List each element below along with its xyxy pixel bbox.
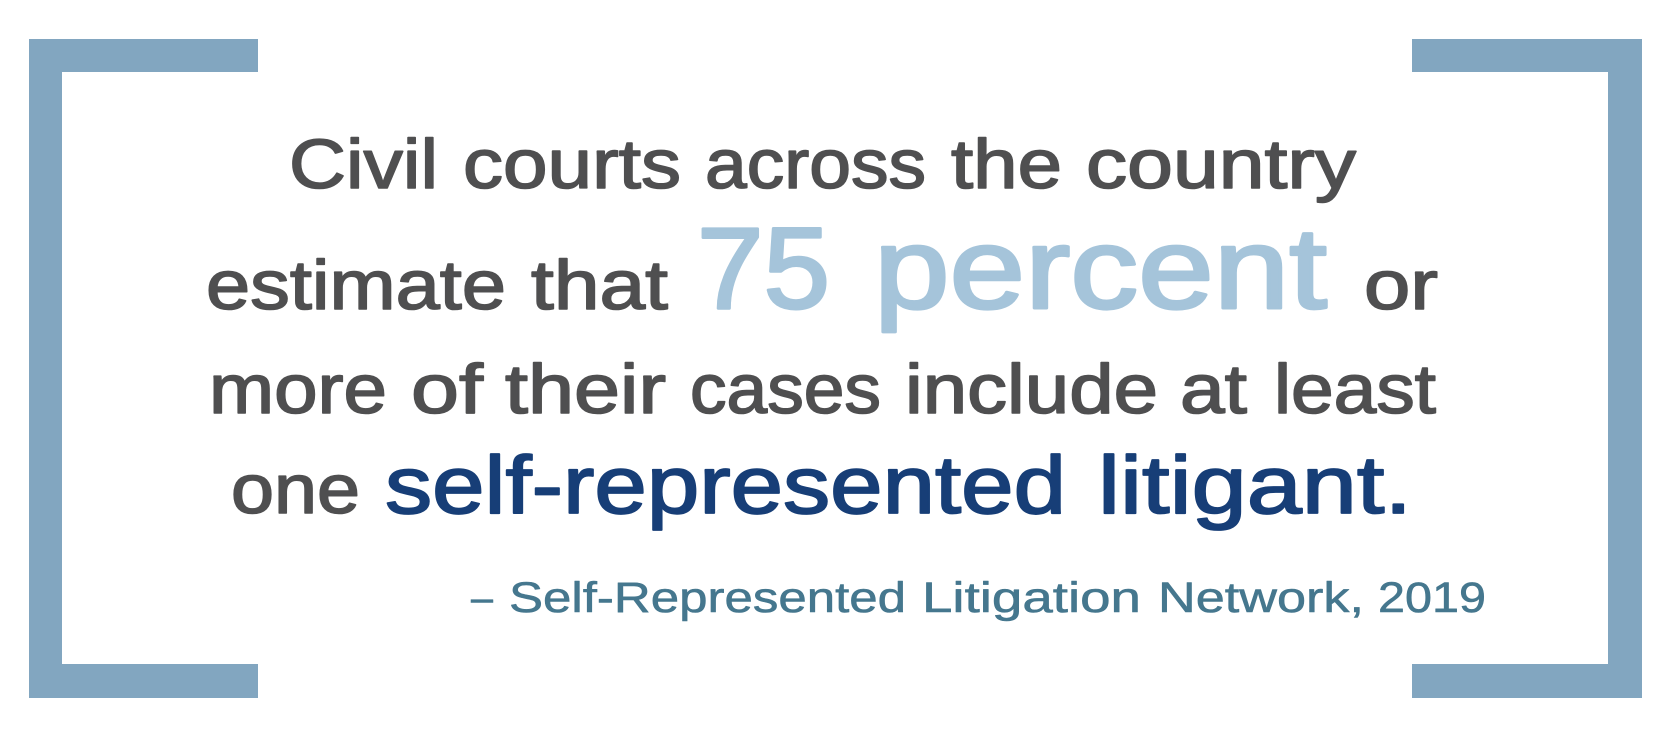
highlight: self-represented litigant: litigant. <box>1098 440 1412 531</box>
highlight: self-represented litigant: self-represented <box>385 440 1066 531</box>
quote line 3: cases <box>690 350 881 428</box>
source attribution: Self-Represented <box>509 574 906 622</box>
quote line 1 <box>289 125 1356 203</box>
highlight: 75 percent: percent <box>874 205 1327 333</box>
quote line 2: or <box>1364 246 1438 324</box>
quote line 4: one <box>231 450 360 528</box>
quote line 4 <box>231 440 1412 531</box>
quote line 3: least <box>1274 350 1436 428</box>
source attribution: 2019 <box>1378 574 1486 622</box>
quote line 3: more <box>209 350 387 428</box>
quote line 2: estimate <box>206 246 506 324</box>
source attribution: – <box>471 574 493 622</box>
quote line 1: the <box>951 125 1062 203</box>
quote line 3: at <box>1180 350 1247 428</box>
right bracket <box>1412 39 1642 698</box>
source attribution <box>471 574 1486 622</box>
quote line 1: Civil <box>289 125 438 203</box>
highlight: 75 percent: 75 <box>697 205 830 333</box>
quote line 3: their <box>505 350 666 428</box>
quote line 1: across <box>705 125 926 203</box>
highlight: self-represented litigant <box>385 440 1412 531</box>
quote line 3 <box>209 350 1436 428</box>
left bracket <box>29 39 258 698</box>
quote line 2 <box>206 205 1438 333</box>
quote line 3: of <box>411 350 484 428</box>
quote line 3: include <box>905 350 1158 428</box>
source attribution: Network, <box>1158 574 1364 622</box>
quote line 1: courts <box>463 125 681 203</box>
quote line 1: country <box>1086 125 1356 203</box>
highlight: 75 percent <box>697 205 1327 333</box>
quote line 2: that <box>531 246 668 324</box>
source attribution: Litigation <box>922 574 1141 622</box>
